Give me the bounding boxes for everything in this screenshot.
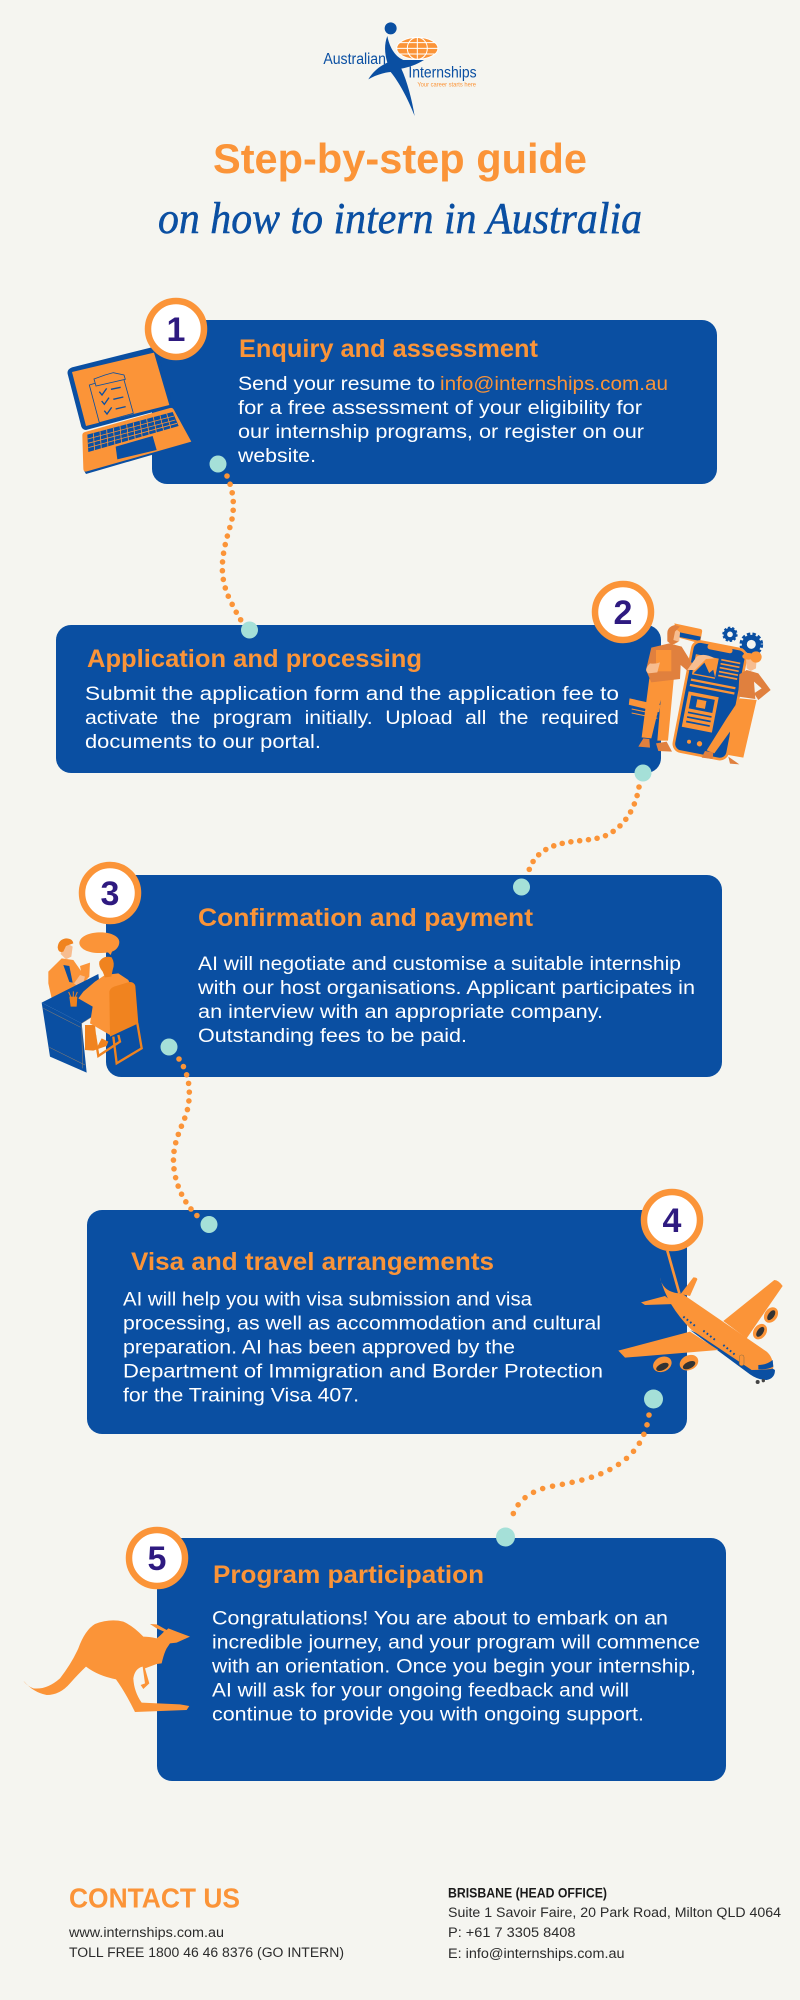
woman (707, 698, 757, 758)
number badge 2 (595, 584, 651, 640)
number badge 3: 3 (101, 875, 119, 913)
number badge 4: 4 (663, 1202, 682, 1240)
body text 3: Outstanding fees to be paid. (198, 1026, 467, 1047)
engines far (761, 1305, 781, 1325)
body text 1 (237, 374, 668, 467)
icon: two people with phone and gears (629, 623, 771, 764)
icon: laptop with checklist (68, 347, 192, 474)
body text 5 (211, 1608, 700, 1726)
panel: step 5 program participation (23, 1530, 726, 1781)
card 5 background (157, 1538, 726, 1781)
body text 1: website. (237, 446, 316, 467)
website and toll free: TOLL FREE 1800 46 46 8376 (GO INTERN) (69, 1945, 344, 1960)
logo: Australian Internships: Australian (323, 51, 386, 68)
body text 1: Send your resume to (238, 374, 435, 395)
logo: Australian Internships: Your career starts here (417, 82, 476, 89)
card 3 background (106, 875, 722, 1077)
number badge 2: 2 (614, 594, 632, 632)
body text 4 (123, 1290, 603, 1406)
body text 4: preparation. AI has been approved by the (123, 1338, 515, 1358)
body text 1: our internship programs, or register on our (238, 422, 645, 443)
body text 3: AI will negotiate and customise a suitable internship (198, 954, 681, 975)
icon: interview at a desk (42, 932, 142, 1073)
card 1 background (152, 320, 717, 484)
body text 5: with an orientation. Once you begin your internship, (211, 1656, 696, 1678)
body text 5: AI will ask for your ongoing feedback and will (212, 1680, 629, 1702)
panel: step 2 application and processing (56, 584, 771, 773)
body text 2: documents to our portal. (85, 732, 321, 753)
body text 2 (85, 684, 619, 753)
head office address: P: +61 7 3305 8408 (448, 1925, 576, 1940)
icon: airplane (618, 1251, 783, 1384)
head office address: Suite 1 Savoir Faire, 20 Park Road, Milton QLD 4064 (448, 1905, 782, 1920)
body text 4: for the Training Visa 407. (123, 1386, 359, 1406)
connector: step 4 to step 5 (496, 1390, 663, 1546)
number badge 5 (129, 1530, 185, 1586)
body text 3: with our host organisations. Applicant participates in (197, 978, 695, 999)
heading 4: Visa and travel arrangements (131, 1248, 494, 1276)
gears (723, 628, 762, 655)
floating card left (629, 699, 660, 718)
logo: Australian Internships: Internships (408, 64, 477, 81)
number badge 5: 5 (148, 1540, 166, 1578)
body text 5: continue to provide you with ongoing support. (212, 1704, 644, 1726)
applicant (85, 1025, 108, 1051)
interviewer (48, 958, 85, 998)
panel: step 3 confirmation and payment (42, 865, 722, 1077)
body text 4: AI will help you with visa submission and visa (123, 1290, 532, 1310)
fuselage (690, 1330, 775, 1380)
panel: step 1 enquiry and assessment (68, 301, 717, 484)
card 4 background (87, 1210, 687, 1434)
website and toll free: www.internships.com.au (68, 1925, 224, 1940)
body text 3: an interview with an appropriate company. (198, 1002, 603, 1023)
heading 1: Enquiry and assessment (239, 335, 539, 363)
head office address: E: info@internships.com.au (448, 1946, 624, 1961)
heading 5: Program participation (213, 1561, 484, 1589)
title: Step-by-step guide (213, 135, 587, 182)
head office address (448, 1886, 782, 1961)
heading 3: Confirmation and payment (198, 904, 534, 932)
desk (42, 974, 103, 1023)
body text 3 (197, 954, 695, 1047)
connector: step 3 to step 4 (160, 1038, 218, 1233)
card 2 background (56, 625, 661, 773)
body text 1: for a free assessment of your eligibility for (238, 398, 643, 419)
head office address: BRISBANE (HEAD OFFICE) (448, 1886, 607, 1900)
connector: step 2 to step 3 (513, 764, 652, 896)
engines near (650, 1354, 674, 1375)
far wing and tail (723, 1280, 783, 1338)
heading 2: Application and processing (87, 645, 422, 673)
floating card top (674, 623, 702, 643)
panel: step 4 visa and travel arrangements (87, 1192, 783, 1434)
near wing and stabiliser (641, 1296, 675, 1305)
logo: Australian Internships (323, 22, 477, 116)
man (642, 676, 674, 741)
number badge 3 (82, 865, 138, 921)
chair (109, 982, 138, 1037)
number badge 1 (148, 301, 204, 357)
subtitle: on how to intern in Australia (158, 194, 642, 243)
body text 4: processing, as well as accommodation and cultural (123, 1314, 601, 1334)
contact heading: CONTACT US (69, 1882, 240, 1914)
website and toll free (68, 1925, 344, 1960)
body text 1: info@internships.com.au (440, 374, 668, 395)
body text 5: Congratulations! You are about to embark on an (212, 1608, 668, 1630)
body text 2: activate the program initially. Upload all the required (85, 708, 619, 729)
phone (672, 640, 747, 761)
icon: kangaroo (23, 1620, 190, 1712)
badge pointer (667, 1251, 679, 1293)
number badge 4 (644, 1192, 700, 1248)
speech bubble (79, 932, 119, 955)
connector: step 1 to step 2 (210, 456, 258, 638)
body text 2: Submit the application form and the application fee to (85, 684, 619, 705)
contact us block (68, 1882, 344, 1960)
body text 5: incredible journey, and your program will commence (212, 1632, 700, 1654)
body text 4: Department of Immigration and Border Protection (123, 1362, 603, 1382)
number badge 1: 1 (167, 311, 185, 349)
